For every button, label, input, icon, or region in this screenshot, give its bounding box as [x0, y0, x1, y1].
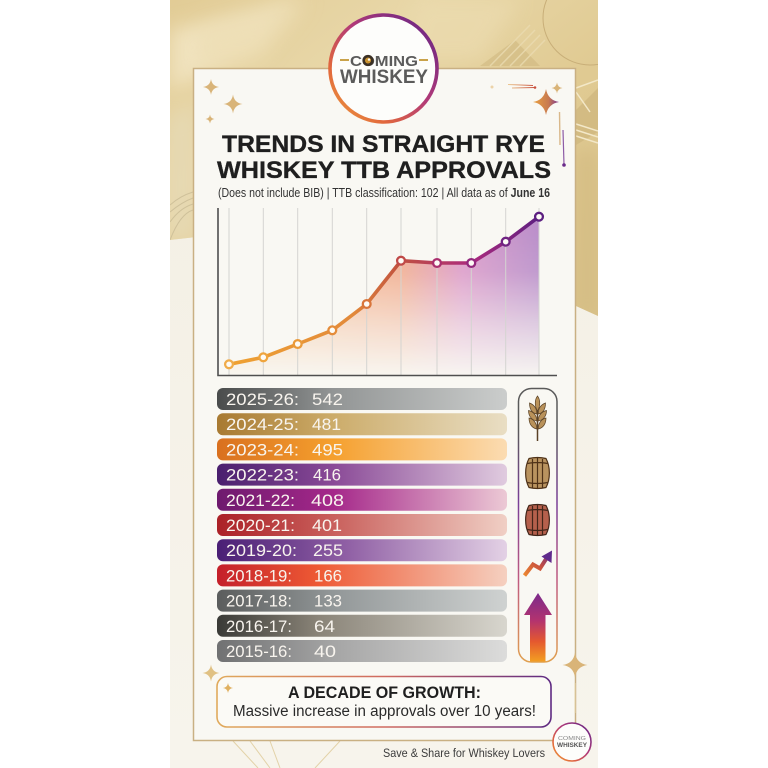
- logo badge: [330, 15, 437, 122]
- icon: rising trend arrow: [524, 550, 552, 576]
- bar 2023-24: 495: [312, 441, 343, 459]
- title: TRENDS IN STRAIGHT RYE: [222, 131, 545, 158]
- bar 2015-16: 40: [314, 643, 336, 661]
- bar 2021-22: 2021-22:: [226, 492, 295, 510]
- callout heading: A DECADE OF GROWTH:: [288, 684, 481, 702]
- bar 2020-21: 2020-21:: [226, 517, 295, 535]
- bar 2018-19: 2018-19:: [226, 567, 292, 585]
- small logo badge: COMING: [558, 736, 586, 742]
- logo wordmark: coming: COMING: [350, 53, 418, 70]
- callout text: Massive increase in approvals over 10 years!: [233, 703, 536, 720]
- grid lines: [229, 208, 539, 375]
- bar 2024-25: 481: [312, 416, 341, 434]
- trend line: [229, 217, 539, 364]
- bar 2025-26: 2025-26:: [226, 391, 299, 409]
- logo dash right: [419, 59, 428, 61]
- callout sparkle: [223, 683, 233, 693]
- bar 2022-23: 416: [313, 467, 341, 485]
- bar 2016-17: [217, 615, 507, 637]
- bar 2025-26: [217, 388, 507, 410]
- bar 2021-22: 408: [311, 492, 344, 510]
- footer text: Save & Share for Whiskey Lovers: [383, 746, 545, 760]
- bar 2024-25: [217, 413, 507, 435]
- bar 2018-19: [217, 564, 507, 586]
- icon panel: [518, 388, 557, 662]
- bar 2021-22: [217, 489, 507, 511]
- bar 2024-25: 2024-25:: [226, 416, 299, 434]
- bar 2017-18: 133: [314, 593, 342, 611]
- sparkles top left: [203, 79, 242, 124]
- icon: wheat: [528, 396, 546, 441]
- icon: oak barrel: [526, 458, 549, 489]
- small logo badge: WHISKEY: [557, 742, 588, 749]
- bar 2022-23: 2022-23:: [226, 467, 299, 485]
- background: [170, 0, 637, 768]
- bar 2019-20: 255: [313, 542, 343, 560]
- logo dash left: [340, 59, 349, 61]
- callout: [217, 676, 551, 727]
- small logo badge: [553, 723, 591, 761]
- bar 2022-23: [217, 464, 507, 486]
- data points: [225, 213, 543, 368]
- bar 2019-20: 2019-20:: [226, 542, 297, 560]
- bar 2023-24: [217, 438, 507, 460]
- bar 2018-19: 166: [314, 567, 342, 585]
- bar 2016-17: 64: [314, 618, 335, 636]
- bar 2019-20: [217, 539, 507, 561]
- bar 2020-21: 401: [312, 517, 342, 535]
- bar 2025-26: 542: [312, 391, 343, 409]
- icon: red barrel: [526, 504, 549, 536]
- bar 2017-18: 2017-18:: [226, 593, 292, 611]
- logo wordmark: whiskey: WHISKEY: [340, 66, 428, 88]
- card panel: [194, 68, 576, 740]
- bar 2017-18: [217, 590, 507, 612]
- subtitle: (Does not include BIB) | TTB classification: 102 | All data as of June 16: [218, 185, 550, 200]
- title: [217, 131, 551, 184]
- sparkles top right: [490, 82, 566, 167]
- axes: [218, 208, 557, 376]
- area fill: [229, 217, 539, 375]
- bar 2015-16: [217, 640, 507, 662]
- title: WHISKEY TTB APPROVALS: [217, 157, 551, 184]
- bar 2015-16: 2015-16:: [226, 643, 292, 661]
- icon: big up arrow: [524, 593, 552, 662]
- bar 2016-17: 2016-17:: [226, 618, 292, 636]
- line chart: [218, 208, 557, 376]
- logo swirl: [362, 55, 374, 66]
- bar 2023-24: 2023-24:: [226, 441, 299, 459]
- bar 2020-21: [217, 514, 507, 536]
- approvals by year bars: [217, 388, 507, 662]
- sparkles bottom: [202, 652, 588, 713]
